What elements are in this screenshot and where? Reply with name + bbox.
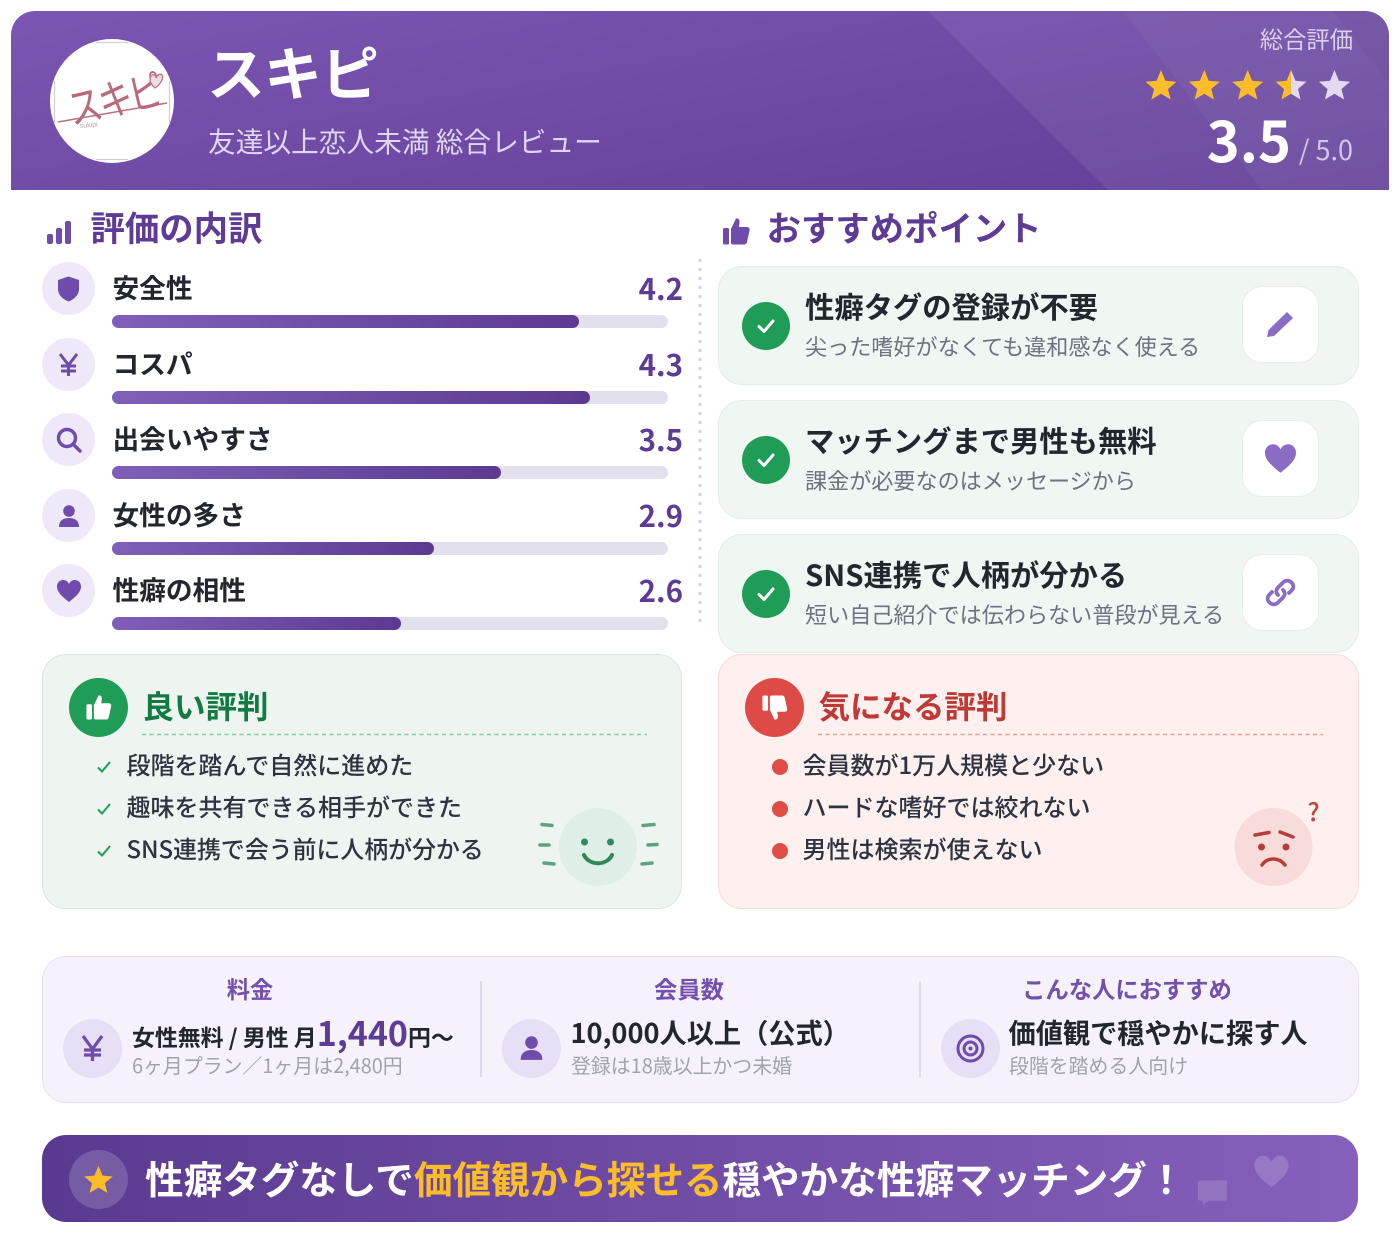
icon: speech bubble <box>1198 1180 1227 1204</box>
heading: good reviews: 良い評判 <box>142 682 269 728</box>
score maximum: / 5.0 <box>1299 128 1353 168</box>
rating row: kink compatibility: 性癖の相性 <box>112 568 246 608</box>
rating row: kink compatibility <box>42 564 683 630</box>
logo <box>50 39 174 163</box>
icon: worried face <box>1234 792 1320 886</box>
rating row: cost performance: 4.3 <box>639 342 683 384</box>
list: good points: 段階を踏んで自然に進めた <box>126 746 413 781</box>
rating row: safety: 4.2 <box>639 266 683 308</box>
icon: thumbs down badge <box>744 678 804 736</box>
rating row: number of women: 女性の多さ <box>112 494 246 532</box>
icon: star badge <box>68 1150 128 1208</box>
heading: recommended for: こんな人におすすめ <box>1022 971 1232 1005</box>
rating row: kink compatibility: 2.6 <box>639 568 683 610</box>
heading: concerning reviews: 気になる評判 <box>818 682 1008 728</box>
icon: yen <box>63 1019 122 1078</box>
recommended text: 価値観で穏やかに探す人 <box>1008 1011 1308 1051</box>
icon: check <box>742 302 790 350</box>
icon: person <box>502 1019 561 1078</box>
list: concerns <box>772 746 1104 865</box>
icon: check <box>742 436 790 484</box>
icon: person <box>42 489 95 542</box>
point card: SNS integration <box>718 534 1358 652</box>
rating row: ease of meeting: 出会いやすさ <box>112 418 273 456</box>
members text: 10,000人以上（公式） <box>570 1011 850 1051</box>
overall rating label: 総合評価 <box>1260 21 1353 55</box>
icon: shield <box>42 262 95 315</box>
point card: free for men until matching: 課金が必要なのはメッセージから <box>805 464 1136 496</box>
icon: bar chart <box>47 221 71 244</box>
rating row: cost performance <box>42 338 683 404</box>
point card: SNS integration: SNS連携で人柄が分かる <box>805 552 1127 594</box>
title: スキピ <box>207 28 378 112</box>
call to action banner <box>42 1135 1358 1222</box>
point card: free for men until matching <box>718 400 1358 518</box>
point card: SNS integration: 短い自己紹介では伝わらない普段が見える <box>805 598 1224 630</box>
heading: price: 料金 <box>227 971 273 1005</box>
icon: magnifier <box>42 413 95 466</box>
icon: worried face: ? <box>1307 792 1320 828</box>
icon: pencil <box>1242 286 1319 363</box>
panel: service facts <box>42 956 1358 1102</box>
rating row: safety: 安全性 <box>112 266 193 306</box>
icon: yen <box>42 338 95 391</box>
icon: smiling face <box>538 808 659 886</box>
icon: link <box>1242 554 1319 631</box>
recommended note: 段階を踏める人向け <box>1009 1050 1188 1078</box>
members note: 登録は18歳以上かつ未婚 <box>571 1050 792 1078</box>
subtitle: 友達以上恋人未満 総合レビュー <box>208 120 602 160</box>
list: good points: SNS連携で会う前に人柄が分かる <box>126 830 484 865</box>
heading: rating breakdown: 評価の内訳 <box>90 201 262 251</box>
panel: concerning reviews <box>718 654 1358 909</box>
rating row: number of women: 2.9 <box>639 494 683 536</box>
list: concerns: ハードな嗜好では絞れない <box>802 788 1090 823</box>
icon: thumbs up badge <box>68 678 128 736</box>
logo: sukipi <box>80 121 98 130</box>
rating row: ease of meeting <box>42 413 683 479</box>
header banner <box>11 11 1389 190</box>
rating row: cost performance: コスパ <box>112 342 193 382</box>
rating row: ease of meeting: 3.5 <box>639 418 683 460</box>
point card: no tag registration <box>718 266 1358 384</box>
logo: スキピ <box>61 56 167 138</box>
icon: thumbs up <box>723 218 750 244</box>
icon: heart <box>1242 420 1319 497</box>
price text: 女性無料 / 男性 月1,440円〜 <box>132 1006 454 1056</box>
rating row: safety <box>42 262 683 328</box>
call to action text: 性癖タグなしで価値観から探せる穏やかな性癖マッチング！ <box>145 1150 1185 1206</box>
star rating <box>1146 70 1350 100</box>
heading: recommended points: おすすめポイント <box>766 201 1042 251</box>
panel: good reviews <box>42 654 682 909</box>
price note: 6ヶ月プラン／1ヶ月は2,480円 <box>132 1050 403 1078</box>
point card: free for men until matching: マッチングまで男性も無料 <box>805 418 1157 460</box>
overall score: 3.5 <box>1207 98 1291 179</box>
list: concerns: 男性は検索が使えない <box>802 830 1042 865</box>
icon: target <box>940 1019 1000 1078</box>
list: concerns: 会員数が1万人規模と少ない <box>802 746 1104 781</box>
point card: no tag registration: 性癖タグの登録が不要 <box>805 284 1098 326</box>
icon: heart watermark <box>1254 1156 1288 1187</box>
point card: no tag registration: 尖った嗜好がなくても違和感なく使える <box>805 330 1200 362</box>
heading: members: 会員数 <box>654 971 724 1005</box>
list: good points: 趣味を共有できる相手ができた <box>126 788 462 823</box>
icon: heart <box>42 564 95 617</box>
rating row: number of women <box>42 489 683 555</box>
list: good points <box>97 746 484 865</box>
icon: check <box>742 570 790 618</box>
